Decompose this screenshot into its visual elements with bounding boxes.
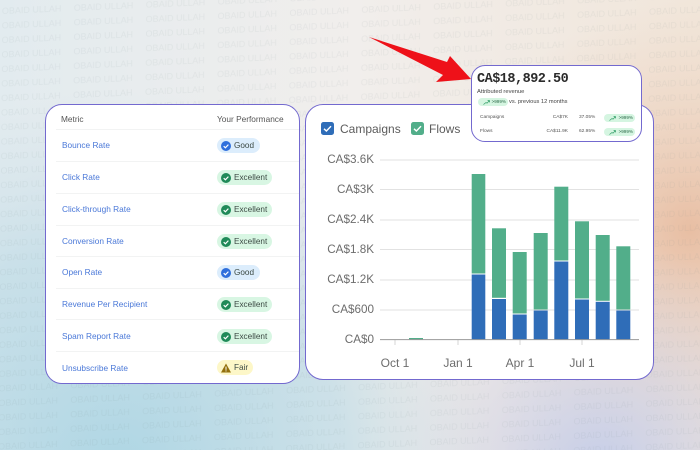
row: Flows: 62.95% [579,129,595,134]
x label: Jul 1 [569,356,595,370]
legend: Flows: Flows [429,122,460,136]
metric: Unsubscribe Rate: Unsubscribe Rate [62,363,128,373]
y label: CA$2.4K [327,213,374,226]
badge: Fair [217,360,253,375]
badge: Excellent [217,202,272,217]
metric: Conversion Rate: Conversion Rate [62,236,124,246]
badge: Excellent: Excellent [234,173,267,182]
row: Flows: >999% [619,129,633,134]
y label: CA$1.2K [327,273,374,286]
legend: Flows [411,122,460,136]
y axis labels [327,153,374,346]
metric: Click Rate: Click Rate [62,172,100,182]
badge: Good: Good [234,268,254,277]
bars: Flows [409,174,630,340]
x axis labels [381,356,595,370]
badge: Excellent: Excellent [234,205,267,214]
growth chip: >999% [492,99,506,104]
x label: Apr 1 [506,356,534,370]
x label: Oct 1 [381,356,409,370]
chart legend [321,122,460,136]
y label: CA$1.8K [327,243,374,256]
row: Campaigns [480,114,635,122]
row: Flows: Flows [480,129,493,134]
badge: Good: Good [234,141,254,150]
bars: Campaigns [472,262,630,340]
row: Campaigns: 37.05% [579,115,595,120]
table header: Your Performance: Your Performance [217,114,284,124]
arrow: red pointer to callout [369,37,471,82]
revenue amount: CA$18,892.50 [477,72,568,87]
badge: Excellent [217,234,272,249]
y label: CA$3.6K [327,153,374,166]
badge: Excellent [217,297,272,312]
row: Campaigns: >999% [619,115,633,120]
badge: Fair: Fair [234,363,248,372]
stacked bar chart [380,160,639,345]
metric: Spam Report Rate: Spam Report Rate [62,331,131,341]
metric: Click-through Rate: Click-through Rate [62,204,131,214]
metric: Revenue Per Recipient: Revenue Per Recipient [62,299,147,309]
x label: Jan 1 [443,356,473,370]
callout: attributed revenue [471,65,642,142]
row: Campaigns: Campaigns [480,115,504,120]
badge: Excellent: Excellent [234,332,267,341]
badge: Excellent [217,170,272,185]
comparison text: vs. previous 12 months [509,98,567,104]
y label: CA$0 [345,333,374,346]
badge: Good [217,138,260,153]
badge: Excellent [217,329,272,344]
metric: Bounce Rate: Bounce Rate [62,140,110,150]
metric: Open Rate: Open Rate [62,267,102,277]
badge: Excellent: Excellent [234,237,267,246]
legend: Campaigns: Campaigns [340,122,401,136]
y label: CA$600 [332,303,374,316]
badge: Excellent: Excellent [234,300,267,309]
y label: CA$3K [337,183,374,196]
attributed revenue label: Attributed revenue [477,89,524,95]
row: Flows [480,128,635,136]
row: Campaigns: CA$7K [553,115,568,120]
badge: Good [217,265,260,280]
row: Flows: CA$11.9K [546,129,568,134]
panel: revenue chart [305,104,654,380]
growth chip [478,98,508,106]
panel: metric table [45,104,300,384]
table header: Metric: Metric [61,114,84,124]
